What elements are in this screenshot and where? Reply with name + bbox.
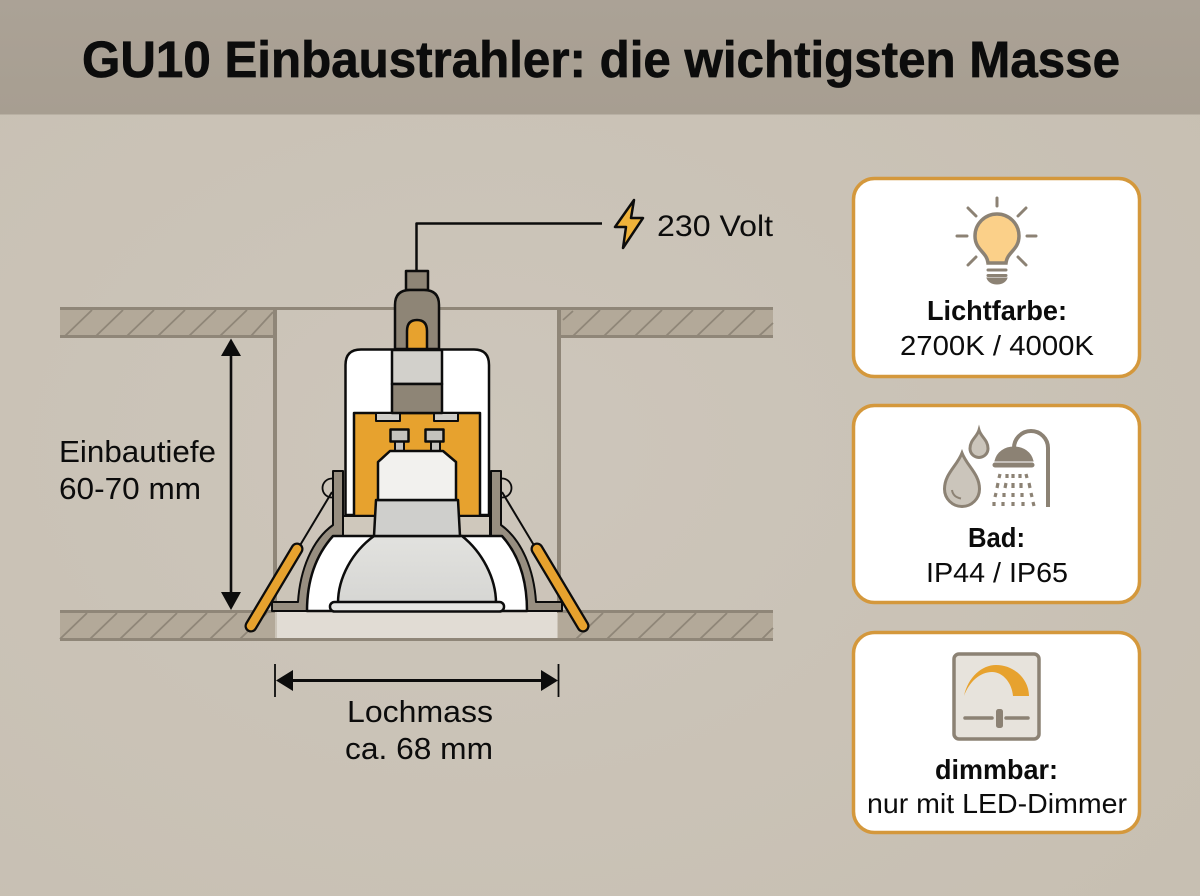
title banner <box>0 0 1200 114</box>
hole dimension <box>275 664 558 766</box>
title: GU10 Einbaustrahler: die wichtigsten Masse <box>82 31 1120 88</box>
recessed spotlight fixture <box>251 224 602 638</box>
bottom trim plate <box>277 612 557 638</box>
GU10 pins <box>390 430 444 452</box>
icon: water drops <box>944 430 988 506</box>
panel: dimmable <box>854 632 1140 832</box>
white housing <box>346 350 489 515</box>
power cable <box>416 224 602 270</box>
card text: nur mit LED-Dimmer <box>867 788 1127 819</box>
voltage label <box>615 200 774 248</box>
icon: shower <box>993 431 1048 507</box>
hole label: Lochmass <box>347 694 493 729</box>
icon: light bulb <box>957 198 1036 284</box>
connector plug <box>395 271 439 349</box>
ceiling bottom right <box>557 610 773 641</box>
depth arrow <box>221 338 241 610</box>
lamp reflector <box>338 536 496 603</box>
card text: Bad: <box>968 522 1025 553</box>
voltage text: 230 Volt <box>657 210 774 243</box>
card text: Lichtfarbe: <box>927 295 1067 326</box>
lamp neck <box>374 500 460 536</box>
centre terminal block <box>392 350 442 413</box>
depth dimension <box>59 338 241 610</box>
depth label: Einbautiefe <box>59 434 216 469</box>
card text: dimmbar: <box>935 754 1058 785</box>
ceiling top left <box>60 307 557 338</box>
panel: light colour <box>854 178 1140 376</box>
grey frame left <box>272 471 343 611</box>
grey frame right <box>491 471 562 611</box>
panel: bathroom <box>854 406 1140 602</box>
card text: IP44 / IP65 <box>926 557 1068 588</box>
mounting spring left <box>251 478 342 626</box>
hole arrow <box>275 664 558 697</box>
depth label: 60-70 mm <box>59 471 201 506</box>
icon: dimmer <box>954 654 1039 739</box>
mounting spring right <box>492 478 583 626</box>
orange mounting chamber <box>354 413 480 516</box>
lamp rim <box>330 602 504 612</box>
cutout edges <box>275 307 559 612</box>
beige spacer <box>343 516 490 537</box>
icon: lightning bolt <box>615 200 643 248</box>
ceiling bottom left <box>60 610 557 641</box>
card text: 2700K / 4000K <box>900 330 1094 361</box>
ceiling top right <box>557 307 773 338</box>
ceiling cross-section <box>60 307 773 641</box>
lamp base <box>378 451 456 500</box>
hole label: ca. 68 mm <box>345 731 493 766</box>
white reflector trim <box>307 536 527 611</box>
